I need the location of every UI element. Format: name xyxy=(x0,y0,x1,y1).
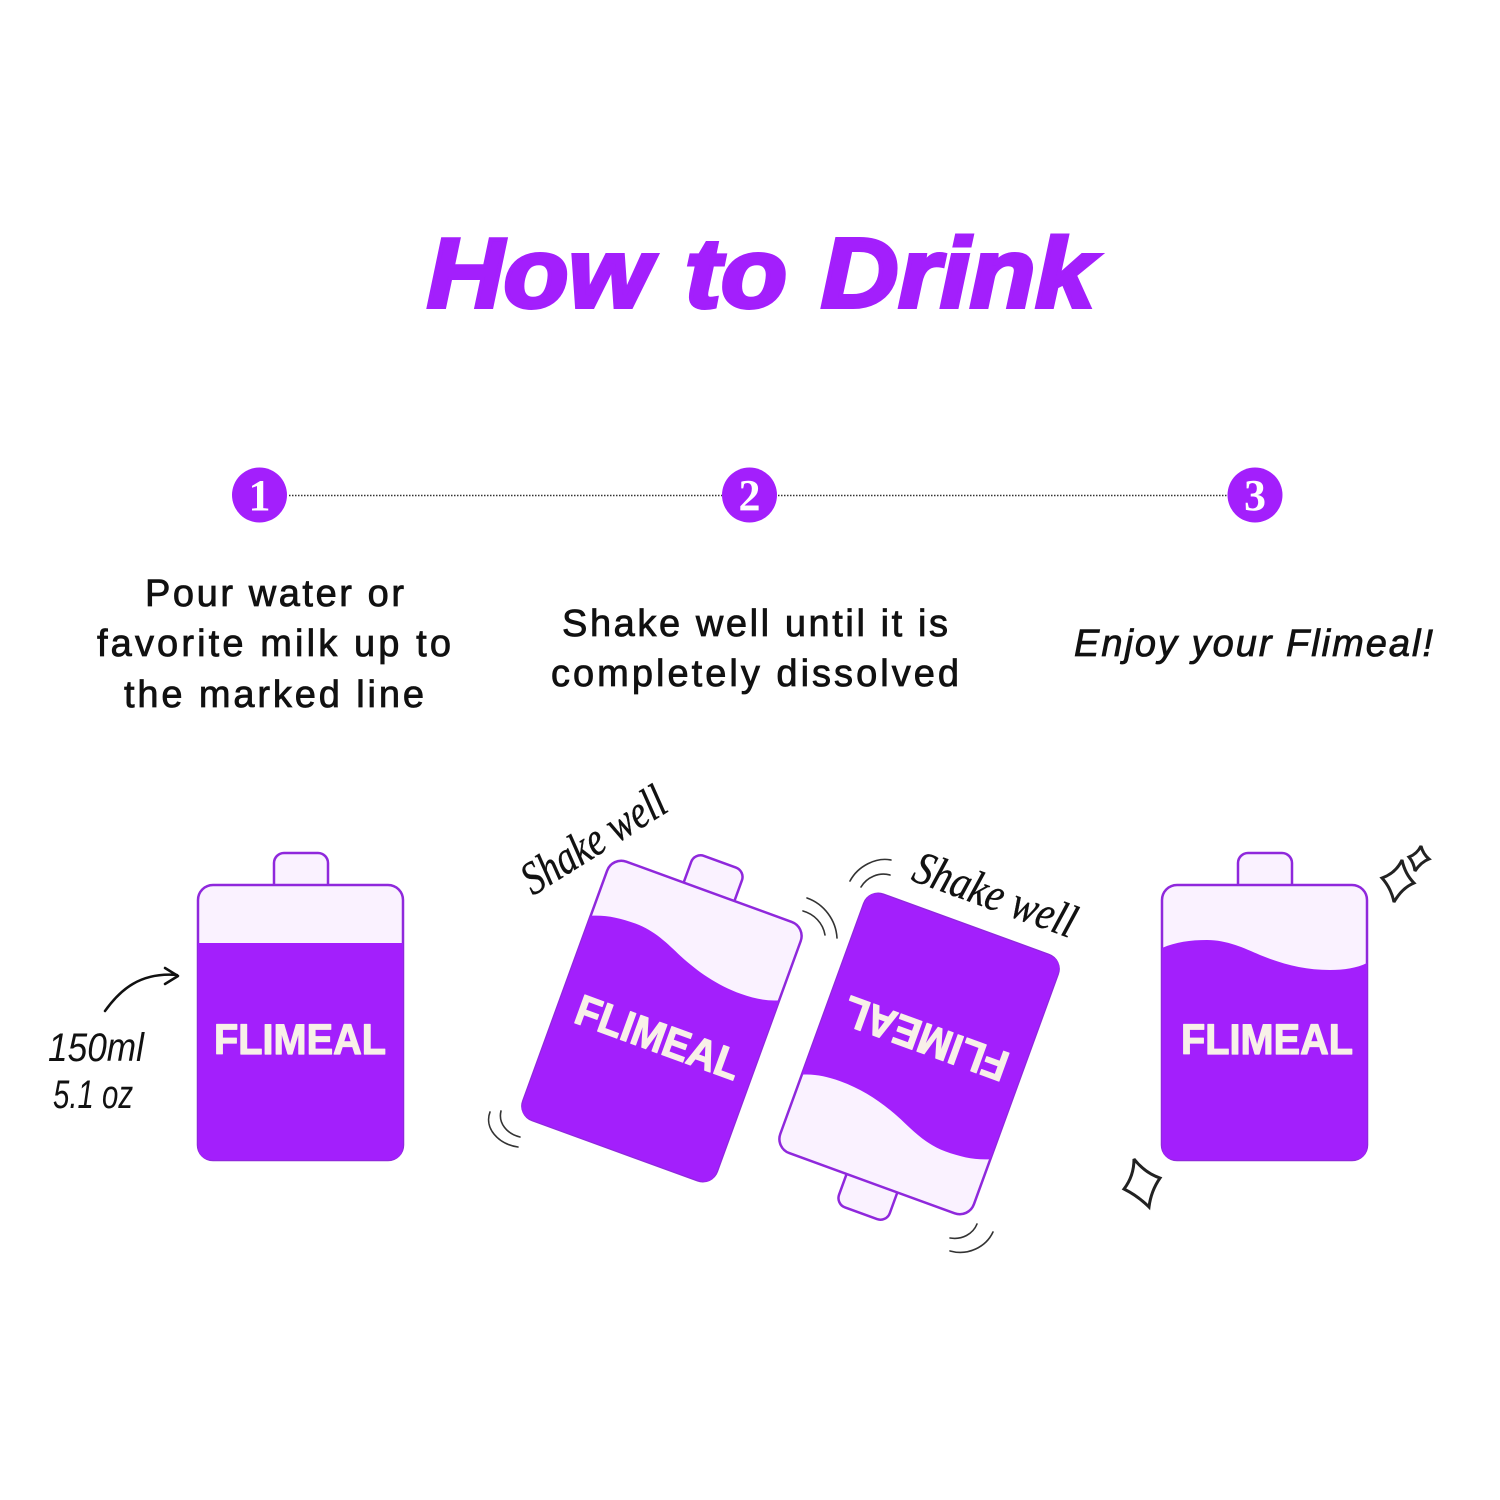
step 3 instructions: Enjoy your Flimeal! xyxy=(1074,623,1433,665)
bottle: step 2 shaking, upside down: FLIMEAL xyxy=(837,986,1015,1090)
step 2 instructions: Shake well until it is xyxy=(562,603,948,645)
motion lines: top of upside-down bottle xyxy=(850,859,891,887)
volume label xyxy=(48,1026,145,1117)
bottle: step 2 shaking, tilted xyxy=(518,826,817,1185)
volume label: 150ml xyxy=(48,1026,145,1070)
bottle: step 3 ready to drink xyxy=(1162,853,1367,1160)
bottle: step 3 ready to drink: FLIMEAL xyxy=(1181,1016,1353,1064)
step 1 number badge: 1 xyxy=(248,471,270,520)
bottle: step 2 shaking, tilted: FLIMEAL xyxy=(569,986,747,1090)
step 2 number badge xyxy=(722,468,777,522)
title: Drink xyxy=(821,218,1100,328)
icon: sparkle large top xyxy=(1382,860,1414,902)
icon: sparkle bottom xyxy=(1124,1159,1160,1207)
title: to xyxy=(685,218,787,328)
step 3 number badge: 3 xyxy=(1244,471,1266,520)
bottle: step 1 filled to line xyxy=(198,853,403,1160)
volume arrow xyxy=(105,968,178,1011)
title xyxy=(427,218,1100,328)
step 1 instructions: the marked line xyxy=(124,674,424,716)
motion lines: bottom of upside-down bottle xyxy=(950,1224,993,1252)
motion lines: bottom left of tilted bottle xyxy=(489,1111,520,1147)
step 2 instructions: completely dissolved xyxy=(551,653,959,695)
volume label: 5.1 oz xyxy=(53,1073,133,1117)
step 2 instructions xyxy=(551,603,959,695)
shake label right: Shake well xyxy=(906,841,1084,948)
step 1 number badge xyxy=(232,468,287,522)
step 1 instructions: Pour water or xyxy=(145,573,404,615)
motion lines: right of tilted bottle xyxy=(803,898,837,938)
shake label left: Shake well xyxy=(511,775,676,905)
bottle: step 2 shaking, upside down xyxy=(764,890,1063,1249)
step 3 number badge xyxy=(1228,468,1282,522)
title: How xyxy=(427,218,657,328)
step 1 instructions xyxy=(97,573,451,716)
step 2 number badge: 2 xyxy=(738,471,760,520)
step 1 instructions: favorite milk up to xyxy=(97,623,451,665)
icon: sparkle small top xyxy=(1409,846,1429,871)
bottle: step 1 filled to line: FLIMEAL xyxy=(214,1016,386,1064)
